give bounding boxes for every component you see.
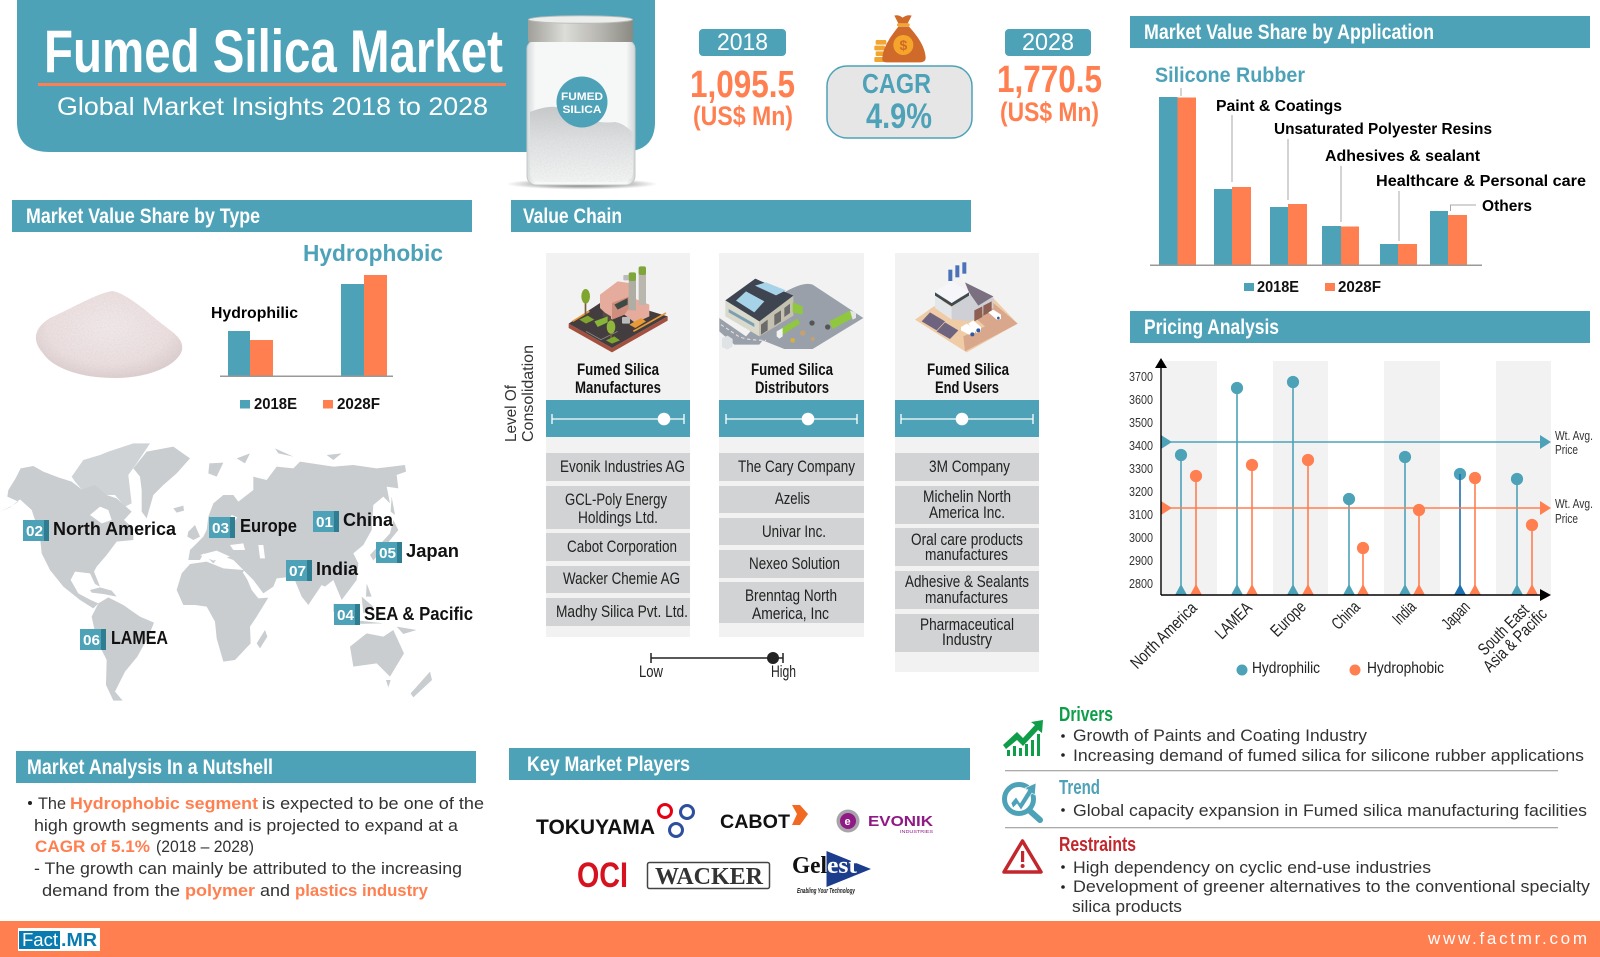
region: LAMEA: [80, 628, 168, 650]
region: India: [286, 559, 359, 581]
hydrophobic stems: [1190, 455, 1538, 595]
category labels: India: [1389, 597, 1420, 629]
text block: nutshell: CAGR of 5.1%: [35, 837, 150, 856]
region: India: 07: [289, 563, 306, 580]
bar chart: type: 2018E: [254, 396, 297, 413]
text block: nutshell: and: [260, 881, 290, 900]
y axis values: 3600: [1129, 392, 1153, 407]
stat: 2028 value: 2028: [1022, 29, 1074, 56]
y axis values: 3400: [1129, 438, 1153, 453]
category labels: LAMEA: [1211, 598, 1256, 643]
list: distributors: America, Inc: [752, 604, 829, 623]
level of consolidation axis label: [503, 345, 537, 442]
panel: trend: [1004, 777, 1587, 820]
logo: Wacker: WACKER: [655, 864, 764, 890]
stat: 2028 value: (US$ Mn): [1000, 97, 1099, 127]
list: manufacturers: Holdings Ltd.: [578, 508, 658, 527]
list: end users: Adhesive & Sealants: [905, 572, 1029, 591]
list: end users: Pharmaceutical: [920, 615, 1014, 634]
text block: nutshell: is expected to be one of the: [262, 794, 484, 813]
list: distributors: The Cary Company: [738, 457, 855, 476]
list: manufacturers: GCL-Poly Energy: [565, 490, 667, 509]
stat: 2018 value: 2018: [717, 29, 768, 56]
legend: low to high: Low: [639, 662, 664, 681]
list: manufacturers: Cabot Corporation: [567, 537, 677, 556]
list: end users: manufactures: [925, 545, 1008, 564]
logo: Gelest: Gel: [792, 853, 827, 879]
bar chart: application: 2028F: [1338, 279, 1381, 296]
list: end users: manufactures: [925, 588, 1008, 607]
text block: nutshell: - The growth can mainly be attributed to the increasing: [34, 859, 462, 878]
bar chart: type: Hydrophilic: [211, 305, 298, 322]
list: end users: 3M Company: [929, 457, 1010, 476]
list: manufacturers: Evonik Industries AG: [560, 457, 685, 476]
panel: trend: Global capacity expansion in Fumed silica manufacturing facilities: [1073, 801, 1587, 820]
text block: nutshell: The: [38, 794, 66, 813]
list: distributors: Brenntag North: [745, 586, 837, 605]
logo: Evonik: [836, 810, 933, 834]
logo: Fact.MR: Fact: [22, 930, 58, 950]
region: India: India: [316, 559, 359, 579]
region: Europe: [209, 516, 297, 538]
column: end users: [895, 253, 1039, 672]
category labels: Europe: [1267, 597, 1310, 641]
logo: Tokuyama: TOKUYAMA: [536, 816, 655, 839]
panel: key market players: [509, 748, 970, 895]
icon: silica jar: [506, 16, 658, 190]
list: end users: Michelin North: [923, 487, 1011, 506]
column: end users: Fumed Silica: [927, 361, 1010, 379]
y axis values: 3000: [1129, 530, 1153, 545]
panel: drivers: Increasing demand of fumed silica for silicone rubber applications: [1073, 746, 1584, 765]
stat: 2028 value: 1,770.5: [997, 59, 1102, 101]
website url: www.factmr.com: [1427, 929, 1587, 948]
icon: magnifier trend: [1004, 783, 1040, 820]
region: SEA and Pacific: 04: [337, 607, 355, 624]
category labels: Japan: [1438, 597, 1474, 633]
bar chart: application: Healthcare & Personal care: [1376, 173, 1586, 190]
panel: market value share by type: [12, 200, 472, 413]
list: end users: America Inc.: [929, 503, 1005, 522]
logo: Gelest: Enabling Your Technology: [797, 888, 856, 895]
list: manufacturers: Madhy Silica Pvt. Ltd.: [556, 602, 688, 621]
icon: powder pile: [36, 291, 182, 378]
logo: Fact.MR: .MR: [61, 930, 97, 950]
text block: nutshell: (2018 – 2028): [156, 837, 254, 856]
category labels: North America: [1127, 598, 1201, 673]
stat: CAGR: CAGR: [862, 68, 931, 99]
panel: market analysis in a nutshell: [16, 751, 484, 900]
panel: market value share by application: [1130, 16, 1590, 296]
axes: [1161, 362, 1545, 595]
bar chart: application: Unsaturated Polyester Resins: [1274, 121, 1492, 138]
icon: factory: [569, 266, 668, 352]
lollipop chart: pricing: [1127, 358, 1593, 677]
panel: restraints: Development of greener alternatives to the conventional specialty: [1073, 877, 1591, 896]
column: end users: End Users: [935, 379, 999, 397]
y axis values: 3200: [1129, 484, 1153, 499]
stat: 2018 value: 1,095.5: [690, 64, 795, 106]
panel: drivers: [1003, 704, 1584, 765]
list: distributors: Univar Inc.: [762, 522, 826, 541]
weighted average lines: Wt. Avg.: [1555, 429, 1593, 443]
icon: warehouse: [719, 279, 863, 350]
panel: restraints: [1004, 834, 1591, 916]
bar chart: application: Silicone Rubber: [1155, 64, 1305, 87]
category labels: South East: [1474, 600, 1533, 659]
list: end users: Oral care products: [911, 530, 1023, 549]
bar chart: type: Hydrophobic: [303, 240, 443, 266]
panel: pricing analysis: [1127, 311, 1593, 677]
panel: trend: Trend: [1059, 777, 1100, 799]
list: end users: Industry: [942, 630, 992, 649]
bar chart: application: Others: [1482, 198, 1532, 215]
column: distributors: Fumed Silica: [751, 361, 834, 379]
consolidation slider: [895, 400, 1039, 437]
legend: low to high: High: [771, 662, 796, 681]
legend: pricing: Hydrophilic: [1252, 660, 1320, 677]
weighted average lines: Wt. Avg.: [1555, 497, 1593, 511]
icon: warning triangle: [1004, 841, 1041, 872]
region: Japan: [376, 541, 459, 563]
weighted average lines: Price: [1555, 443, 1578, 457]
footer: [0, 921, 1600, 957]
logo: OCI: OCI: [577, 856, 628, 895]
logo: Evonik: e: [844, 816, 851, 828]
icon: money bag: [874, 15, 926, 62]
category labels: [1127, 597, 1551, 676]
logo: Fact.MR: [18, 928, 100, 951]
list: manufacturers: Wacker Chemie AG: [563, 569, 680, 588]
text block: nutshell: [28, 794, 484, 900]
logo: Gelest: est: [827, 853, 857, 879]
title: Fumed Silica Market: [44, 18, 503, 85]
level of consolidation axis label: Consolidation: [520, 345, 537, 442]
region: Japan: 05: [379, 545, 396, 562]
level of consolidation axis label: Level Of: [503, 384, 520, 442]
region: SEA and Pacific: SEA & Pacific: [364, 604, 473, 624]
stat: 2018 value: [690, 29, 795, 131]
icon: growth chart: [1003, 720, 1043, 756]
list: distributors: Azelis: [775, 489, 810, 508]
list: manufacturers: [546, 453, 690, 626]
region: Europe: Europe: [240, 516, 297, 536]
consolidation slider: [719, 400, 864, 437]
region: North America: North America: [53, 519, 177, 539]
legend: pricing: [1236, 660, 1444, 677]
region: China: [313, 510, 394, 532]
category labels: Asia & Pacific: [1479, 604, 1551, 676]
region: LAMEA: LAMEA: [111, 628, 168, 648]
panel: value chain: [503, 200, 1039, 681]
stat: 2028 value: [997, 29, 1102, 127]
logo: Tokuyama: [536, 804, 694, 839]
y axis values: 3300: [1129, 461, 1153, 476]
consolidation slider: [546, 400, 690, 437]
column: distributors: Distributors: [755, 379, 829, 397]
region: China: China: [343, 510, 394, 530]
icon: silica jar: SILICA: [562, 104, 602, 116]
logo: Cabot: [720, 805, 808, 833]
legend: low to high: [639, 652, 796, 681]
y axis values: 2900: [1129, 553, 1153, 568]
y axis values: 3500: [1129, 415, 1153, 430]
bar chart: type: [211, 240, 443, 413]
weighted average lines: [1161, 429, 1593, 526]
column: manufactures: Fumed Silica: [577, 361, 660, 379]
weighted average lines: Price: [1555, 512, 1578, 526]
logo: Evonik: INDUSTRIES: [900, 829, 933, 834]
y axis values: 3100: [1129, 507, 1153, 522]
logo: Cabot: CABOT: [720, 812, 790, 833]
list: distributors: [719, 453, 864, 623]
y axis values: [1129, 369, 1153, 591]
legend: pricing: Hydrophobic: [1367, 660, 1444, 677]
panel: restraints: High dependency on cyclic end-use industries: [1073, 858, 1431, 877]
logo: Gelest: [792, 851, 871, 895]
region: Europe: 03: [212, 520, 229, 537]
logo: Evonik: EVONIK: [868, 813, 933, 830]
heading: key players: Key Market Players: [527, 753, 690, 776]
column: manufactures: [546, 253, 690, 637]
icon: silica jar: FUMED: [561, 91, 603, 103]
icon: end-user plant: [915, 258, 1018, 352]
stat: CAGR: 4.9%: [866, 97, 932, 136]
world map with regions: [0, 443, 473, 701]
column: manufactures: Manufactures: [575, 379, 661, 397]
panel: drivers: Growth of Paints and Coating Industry: [1073, 726, 1368, 745]
panel: restraints: silica products: [1072, 897, 1182, 916]
header banner: [17, 0, 655, 152]
map shapes: [0, 443, 432, 701]
region: North America: 02: [26, 523, 43, 540]
subtitle: Global Market Insights 2018 to 2028: [57, 93, 488, 121]
text block: nutshell: polymer: [185, 881, 255, 900]
y axis values: 2800: [1129, 576, 1153, 591]
column: distributors: [719, 253, 864, 637]
heading: by application: Market Value Share by Application: [1144, 21, 1434, 44]
text block: nutshell: Hydrophobic segment: [70, 794, 258, 813]
heading: value chain: Value Chain: [523, 205, 622, 228]
icon: money bag: $: [899, 37, 907, 53]
y axis values: 3700: [1129, 369, 1153, 384]
stat: CAGR: [827, 66, 972, 138]
category labels: China: [1328, 597, 1364, 633]
panel: drivers: Drivers: [1059, 704, 1113, 726]
heading: pricing analysis: Pricing Analysis: [1144, 316, 1279, 339]
region: LAMEA: 06: [83, 632, 100, 649]
text block: nutshell: plastics industry: [295, 881, 429, 900]
bar chart: application: 2018E: [1257, 279, 1299, 296]
list: end users: [895, 453, 1039, 652]
text block: nutshell: high growth segments and is projected to expand at a: [34, 816, 459, 835]
hydrophilic stems: [1175, 377, 1523, 595]
stat: 2018 value: (US$ Mn): [693, 101, 793, 131]
region: Japan: Japan: [406, 541, 459, 561]
bar chart: application: Paint & Coatings: [1216, 98, 1342, 115]
bar chart: application: Adhesives & sealant: [1325, 148, 1481, 165]
panel: restraints: Restraints: [1059, 834, 1136, 856]
bar chart: type: 2028F: [337, 396, 380, 413]
bar chart: application: [1150, 64, 1586, 296]
heading: nutshell: Market Analysis In a Nutshell: [27, 756, 273, 779]
list: distributors: Nexeo Solution: [749, 554, 840, 573]
heading: by type: Market Value Share by Type: [26, 205, 260, 228]
text block: nutshell: demand from the: [42, 881, 180, 900]
region: China: 01: [316, 514, 333, 531]
